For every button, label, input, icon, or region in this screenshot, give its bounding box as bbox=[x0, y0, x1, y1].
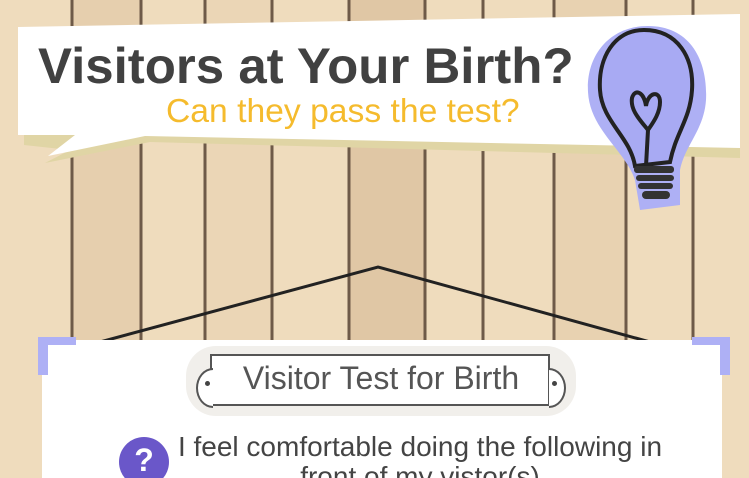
question text: I feel comfortable doing the following in bbox=[178, 431, 662, 462]
plaque heading bbox=[186, 346, 576, 416]
gable roof lines bbox=[102, 266, 648, 340]
banner bbox=[18, 14, 740, 163]
icon: question mark: ? bbox=[134, 442, 154, 478]
corner bracket right bbox=[692, 337, 730, 375]
subtitle: Can they pass the test? bbox=[166, 92, 520, 129]
icon: question mark bbox=[119, 437, 169, 478]
corner brackets bbox=[38, 337, 76, 375]
plaque heading: Visitor Test for Birth bbox=[243, 360, 519, 396]
question text bbox=[178, 431, 662, 478]
icon: light bulb bbox=[588, 26, 706, 210]
title: Visitors at Your Birth? bbox=[38, 38, 574, 94]
panel: visitor test bbox=[42, 340, 722, 478]
